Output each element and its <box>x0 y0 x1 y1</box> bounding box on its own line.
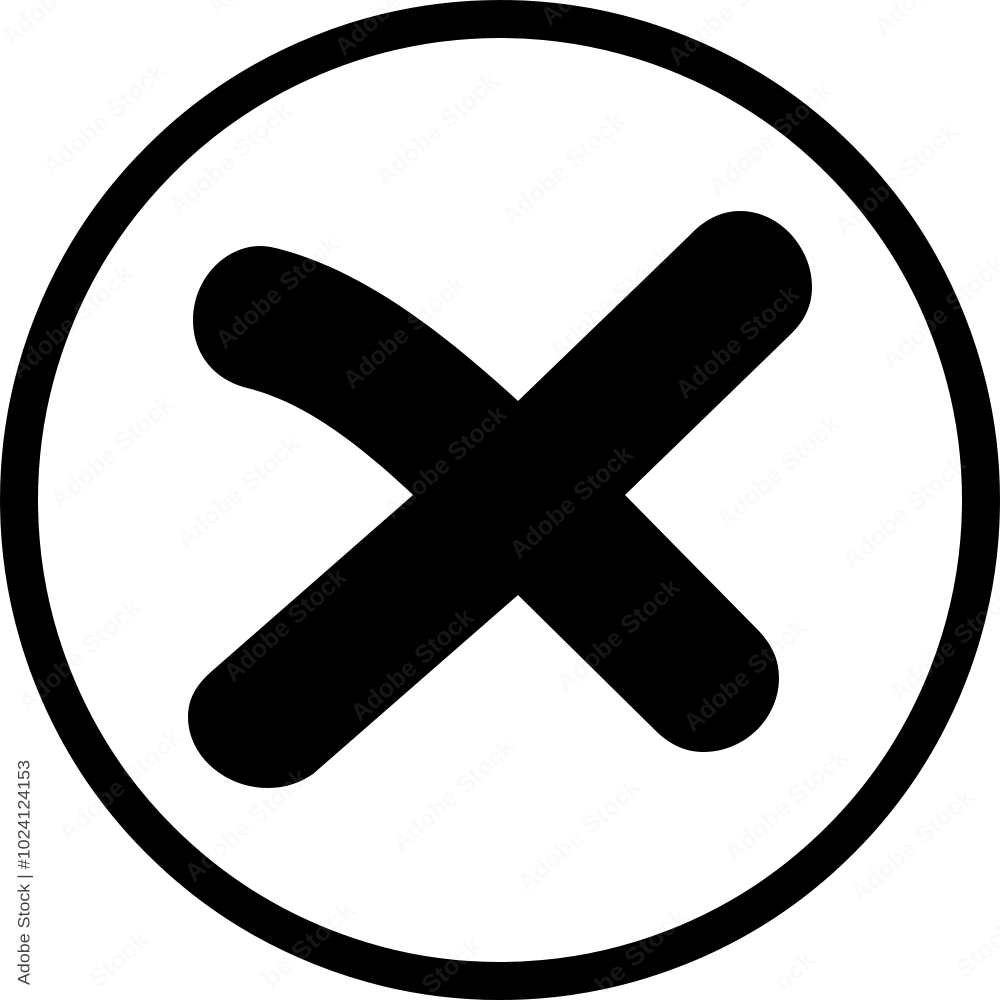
watermark text: Adobe Stock <box>210 230 344 354</box>
watermark text: Adobe Stock <box>845 783 979 907</box>
watermark text: Stock <box>83 926 154 993</box>
watermark text: Adobe Stock <box>4 260 138 384</box>
cross mark <box>188 211 812 788</box>
vertical stock id text: Adobe Stock | #1024124153 <box>14 760 34 985</box>
watermark text: Adobe Stock <box>12 593 146 717</box>
watermark text: Adobe Stock <box>543 240 677 364</box>
watermark text: Adobe Stock <box>386 733 520 857</box>
watermark text: Adobe Stock <box>504 440 638 564</box>
watermark text: Adobe Stock <box>337 270 471 394</box>
watermark text: Adobe Stock <box>719 743 853 867</box>
watermark text: be Stock <box>256 896 361 993</box>
watermark text: Stock <box>416 932 487 999</box>
watermark text: Adobe Stock <box>551 573 685 697</box>
watermark text: Adobe Stock <box>837 450 971 574</box>
watermark text: Adobe Stock <box>345 603 479 727</box>
watermark text: Adobe Stock <box>670 280 804 404</box>
watermark text: Adobe Stock <box>703 77 837 201</box>
watermark text: Adobe Stock <box>171 430 305 554</box>
watermark text: Adobe Stock <box>512 773 646 897</box>
watermark text: be Stock <box>589 902 694 999</box>
watermark text: Adobe Stock <box>711 410 845 534</box>
watermark text: Adobe Stock <box>496 107 630 231</box>
watermark text: Adobe Stock <box>45 390 179 514</box>
watermark text: Adobe Stock <box>678 613 812 737</box>
watermark text: Adobe Stock <box>378 400 512 524</box>
watermark text: Adobe Stock <box>829 117 963 241</box>
watermark text: Adobe Stock <box>37 57 171 181</box>
watermark text: Adobe Stock <box>179 763 313 887</box>
watermark text: Adobe Stock <box>163 97 297 221</box>
watermark text: Adobe Stock <box>218 563 352 687</box>
watermark text: Adobe Stock <box>370 67 504 191</box>
watermark text: Adobe Stock <box>53 723 187 847</box>
watermark text: ock <box>768 945 821 996</box>
